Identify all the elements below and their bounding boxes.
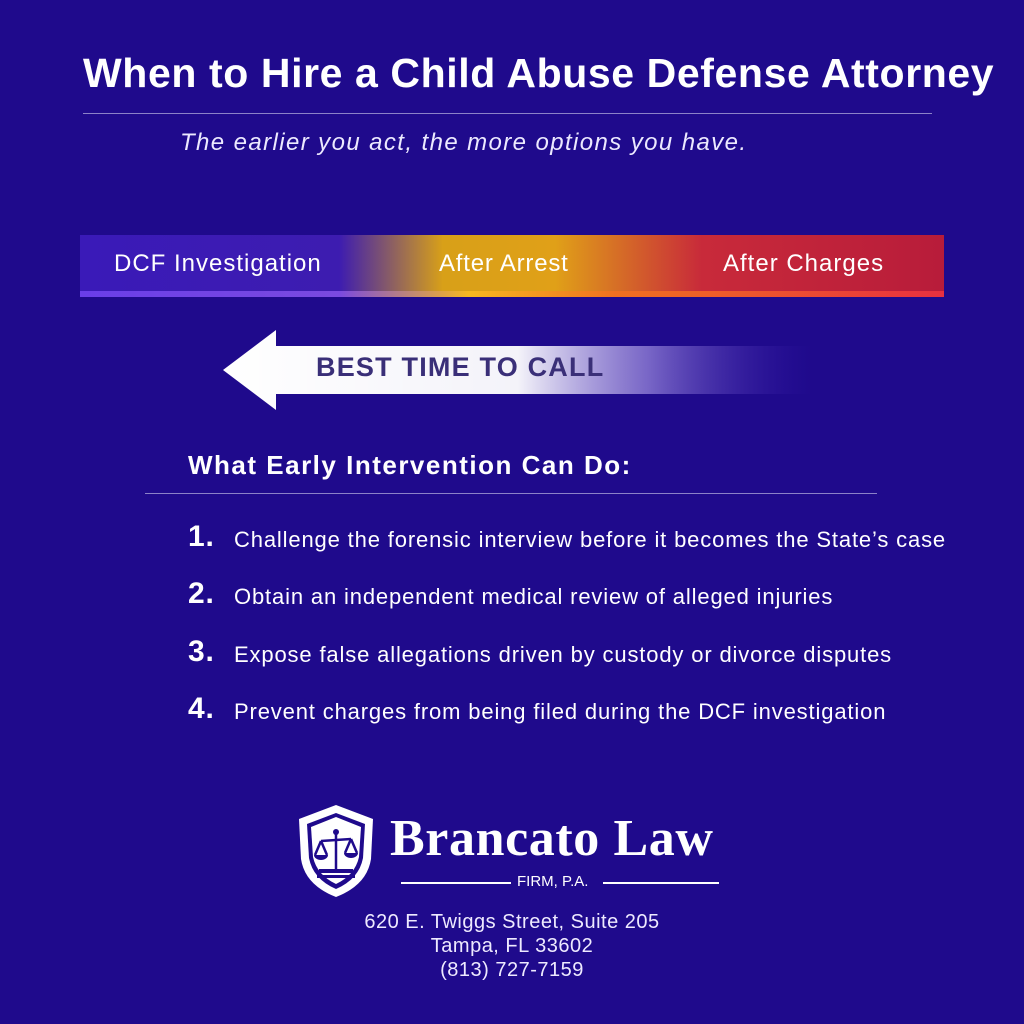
address [364,911,660,981]
title: When to Hire a Child Abuse Defense Attorney [83,50,994,96]
address: 620 E. Twiggs Street, Suite 205 [364,911,660,933]
arrow: best time to call: BEST TIME TO CALL [316,352,604,382]
firm name: Brancato Law [390,810,714,867]
subtitle: The earlier you act, the more options you have. [180,129,747,156]
list: Prevent charges from being filed during the DCF investigation [234,699,886,724]
arrow: best time to call [223,330,775,410]
list: Obtain an independent medical review of alleged injuries [234,584,833,609]
item 3 [188,635,892,668]
timeline bar [80,235,944,297]
label: After Charges: After Charges [723,250,884,277]
logo [299,805,719,897]
list [188,520,946,725]
item 4: 4. [188,692,215,725]
label: DCF Investigation: DCF Investigation [114,250,322,277]
item 1: 1. [188,520,215,553]
item 2: 2. [188,577,215,610]
logo: FIRM, P.A. [517,873,588,890]
list: Challenge the forensic interview before it becomes the State’s case [234,527,946,552]
icon: shield with scales [299,805,373,897]
address: (813) 727-7159 [440,959,584,981]
label: After Arrest: After Arrest [439,250,569,277]
heading: early intervention: What Early Intervention Can Do: [188,450,632,480]
address: Tampa, FL 33602 [431,935,593,957]
item 1 [188,520,946,553]
item 2 [188,577,833,610]
list: Expose false allegations driven by custody or divorce disputes [234,642,892,667]
item 4 [188,692,886,725]
item 3: 3. [188,635,215,668]
